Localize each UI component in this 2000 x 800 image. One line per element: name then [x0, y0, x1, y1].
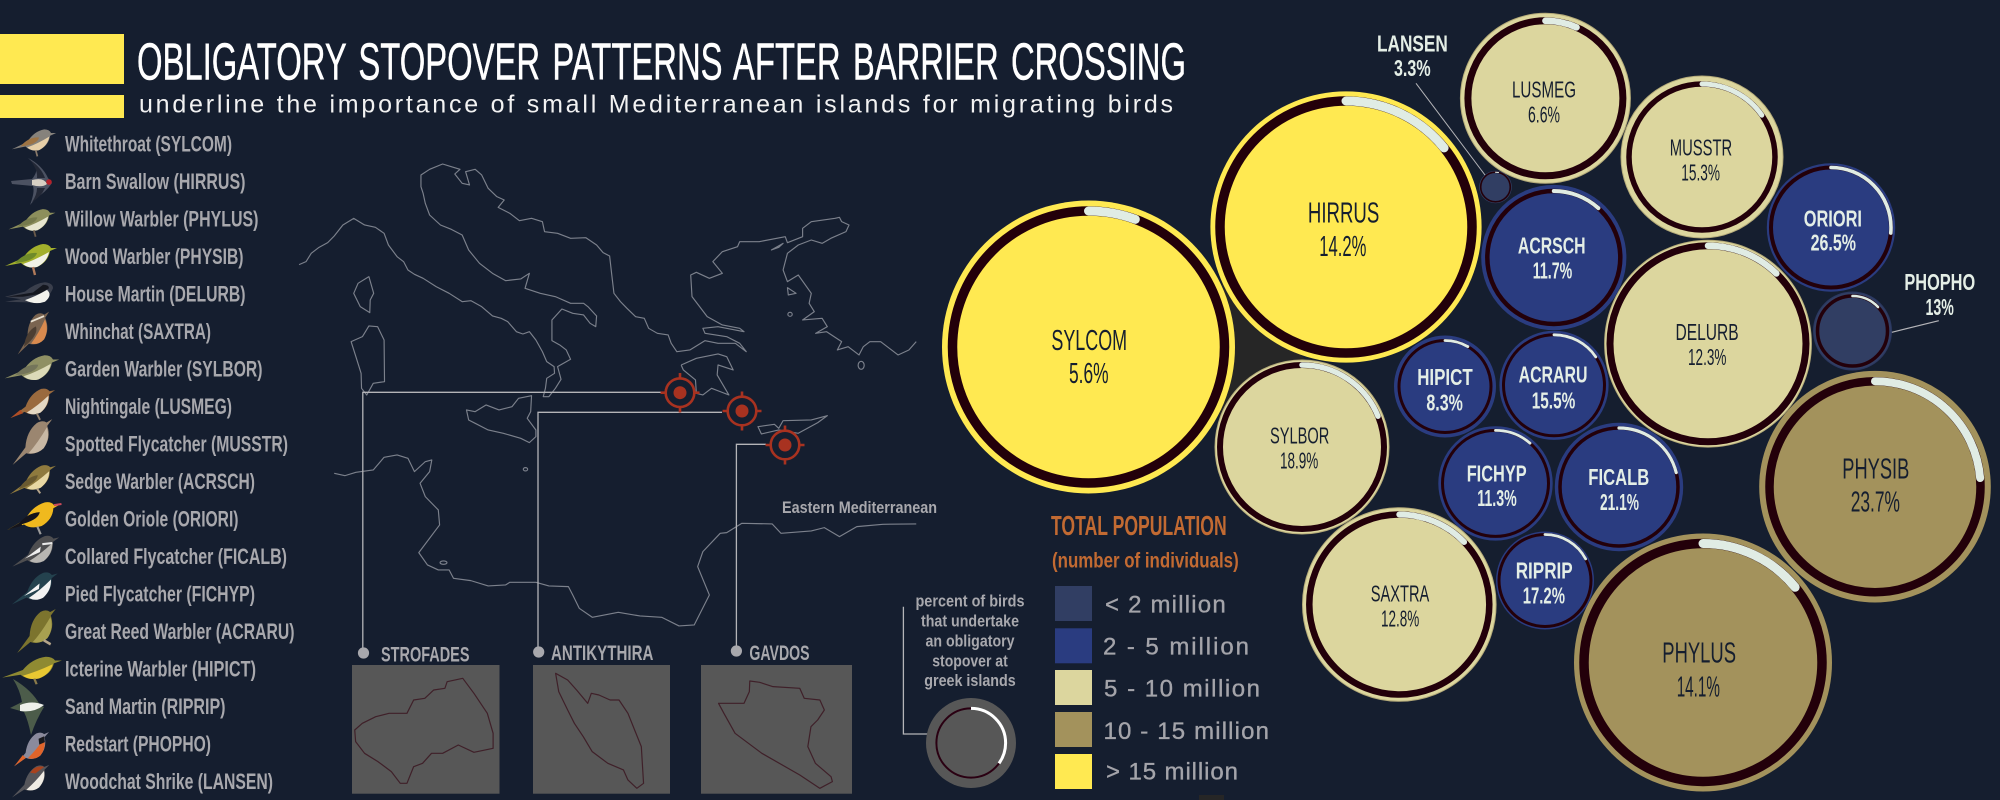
- island box: [701, 665, 852, 794]
- callout: LANSEN: 3.3%: [1394, 55, 1431, 81]
- bubble: ORIORI: 26.5%: [1811, 230, 1856, 256]
- icon: collared flycatcher: [8, 533, 64, 568]
- icon: target Gavdos: [766, 426, 804, 464]
- bubble: PHOPHO: [1814, 292, 1892, 370]
- species names: Collared Flycatcher (FICALB): [65, 544, 287, 569]
- heading: ANTIKYTHIRA: [551, 642, 653, 665]
- icon: target Antikythira: [722, 392, 762, 430]
- icon: redstart: [6, 729, 57, 768]
- legend: total population: [1051, 510, 1269, 789]
- bubble: ACRARU: ACRARU: [1519, 362, 1588, 388]
- bubble: SYLBOR: 18.9%: [1280, 447, 1318, 473]
- icon: nightingale: [6, 386, 60, 426]
- gauge caption: stopover at: [932, 652, 1008, 670]
- bubble: DELURB: DELURB: [1676, 319, 1739, 345]
- bubble: MUSSTR: 15.3%: [1681, 160, 1720, 186]
- bubble: RIPRIP: 17.2%: [1523, 582, 1565, 608]
- gauge disc: [926, 698, 1016, 788]
- bubble: LUSMEG: 6.6%: [1528, 101, 1560, 127]
- icon: woodchat shrike: [5, 762, 56, 799]
- species names: Golden Oriole (ORIORI): [65, 507, 238, 532]
- bubble: PHYLUS: PHYLUS: [1662, 638, 1736, 670]
- swatch: 10 to 15 million: [1055, 712, 1269, 747]
- bubble: SYLBOR: [1215, 360, 1389, 534]
- panel: Gavdos island: [701, 642, 852, 794]
- bubble: SAXTRA: 12.8%: [1381, 606, 1419, 632]
- bubble: HIRRUS: 14.2%: [1319, 231, 1366, 263]
- gauge caption: that undertake: [921, 612, 1019, 630]
- icon: whinchat: [5, 308, 61, 356]
- icon: icterine warbler: [2, 657, 62, 684]
- gauge caption: an obligatory: [926, 632, 1015, 650]
- swatch: 2 to 5 million: 2 - 5 million: [1103, 633, 1249, 660]
- bubble: MUSSTR: MUSSTR: [1670, 135, 1732, 161]
- bubble: SYLBOR: SYLBOR: [1270, 422, 1329, 448]
- island outline: [719, 681, 832, 788]
- bubble: PHYLUS: [1574, 534, 1832, 792]
- heading: STROFADES: [381, 644, 470, 667]
- icon: house martin: [5, 282, 53, 303]
- species names: House Martin (DELURB): [65, 282, 246, 307]
- bubble: SAXTRA: [1302, 508, 1496, 701]
- species names: Whitethroat (SYLCOM): [65, 132, 232, 157]
- gauge legend: [903, 592, 1024, 788]
- bubble: SYLCOM: [942, 200, 1235, 494]
- icon: golden oriole: [4, 500, 65, 539]
- bubble: HIRRUS: HIRRUS: [1308, 198, 1379, 230]
- title accent bar: [0, 34, 124, 84]
- species names: Great Reed Warbler (ACRARU): [65, 619, 294, 644]
- subtitle accent bar: [0, 95, 124, 118]
- bubble: LANSEN: [1479, 171, 1512, 203]
- island outline: [355, 678, 493, 783]
- species names: Icterine Warbler (HIPICT): [65, 657, 256, 682]
- bubble: RIPRIP: [1496, 532, 1594, 630]
- legend heading: TOTAL POPULATION: [1051, 510, 1227, 541]
- species names: Garden Warbler (SYLBOR): [65, 357, 262, 382]
- bubble: HIPICT: HIPICT: [1417, 364, 1473, 390]
- species names: Spotted Flycatcher (MUSSTR): [65, 432, 288, 457]
- species names: Barn Swallow (HIRRUS): [65, 169, 246, 194]
- map label: Eastern Mediterranean: [782, 498, 937, 517]
- bubble: FICALB: [1555, 423, 1683, 551]
- icon: barn swallow: [11, 158, 52, 205]
- swatch: over 15 million: [1055, 754, 1238, 789]
- icon: target Strofades: [660, 373, 700, 412]
- bubble: HIRRUS: [1210, 91, 1482, 363]
- bubble: ACRARU: [1499, 331, 1609, 440]
- species names: Whinchat (SAXTRA): [65, 319, 211, 344]
- map: eastern Mediterranean coastline: [299, 164, 916, 626]
- species names: Pied Flycatcher (FICHYP): [65, 582, 255, 607]
- callout: PHOPHO: 13%: [1926, 294, 1954, 320]
- title: OBLIGATORY STOPOVER PATTERNS AFTER BARRIER CROSSING: [137, 34, 1186, 92]
- bubble: SAXTRA: SAXTRA: [1371, 581, 1430, 607]
- icon: sand martin: [10, 679, 44, 735]
- icon: willow warbler: [9, 209, 55, 237]
- legend subheading: (number of individuals): [1052, 550, 1239, 572]
- bubble: SYLCOM: 5.6%: [1069, 358, 1109, 390]
- species names: Sedge Warbler (ACRSCH): [65, 469, 255, 494]
- bubble: FICALB: FICALB: [1588, 464, 1649, 490]
- bubble: ACRSCH: 11.7%: [1533, 257, 1572, 283]
- bubble: MUSSTR: [1621, 76, 1783, 238]
- panel: Antikythira island: [533, 642, 670, 794]
- bubble: FICALB: 21.1%: [1600, 489, 1639, 515]
- icon: spotted flycatcher: [1, 415, 63, 466]
- bubble: ORIORI: ORIORI: [1804, 206, 1862, 232]
- gauge caption: [916, 592, 1024, 690]
- swatch: under 2 million: [1055, 586, 1226, 621]
- bubble: LUSMEG: [1460, 13, 1630, 183]
- bubble: HIPICT: 8.3%: [1426, 390, 1463, 416]
- bubble: DELURB: 12.3%: [1688, 344, 1726, 370]
- bubble: PHYSIB: PHYSIB: [1842, 453, 1909, 485]
- species names: Wood Warbler (PHYSIB): [65, 244, 244, 269]
- title banner: [0, 34, 1186, 118]
- bubble: ACRSCH: [1481, 185, 1626, 330]
- species names: Nightingale (LUSMEG): [65, 394, 232, 419]
- icon: sedge warbler: [5, 462, 62, 501]
- species names: Woodchat Shrike (LANSEN): [65, 769, 273, 794]
- icon: garden warbler: [5, 355, 59, 380]
- bubble: DELURB: [1605, 240, 1811, 447]
- bubble: SYLCOM: SYLCOM: [1051, 325, 1127, 357]
- island outline: [556, 673, 644, 788]
- species names: Sand Martin (RIPRIP): [65, 694, 226, 719]
- bubble: ACRSCH: ACRSCH: [1518, 232, 1586, 258]
- swatch: 10 to 15 million: 10 - 15 million: [1104, 718, 1269, 745]
- bubble: PHYLUS: 14.1%: [1677, 672, 1720, 704]
- icon: great reed warbler: [5, 605, 69, 660]
- swatch: over 15 million: > 15 million: [1106, 758, 1238, 785]
- bubble: ORIORI: [1767, 163, 1895, 292]
- gauge caption: percent of birds: [916, 592, 1024, 610]
- bubble: ACRARU: 15.5%: [1532, 387, 1575, 413]
- species names: Redstart (PHOPHO): [65, 732, 211, 757]
- bubble: FICHYP: [1438, 426, 1553, 541]
- bubble: PHYSIB: [1759, 371, 1991, 602]
- bubble: RIPRIP: RIPRIP: [1516, 557, 1573, 583]
- island box: [352, 665, 500, 794]
- species names: [65, 132, 294, 794]
- bubble: LUSMEG: LUSMEG: [1512, 76, 1576, 102]
- bubble: FICHYP: FICHYP: [1467, 461, 1527, 487]
- swatch: 5 to 10 million: [1055, 670, 1260, 705]
- callout: PHOPHO: [1892, 269, 1975, 332]
- heading: GAVDOS: [749, 642, 810, 665]
- species names: Willow Warbler (PHYLUS): [65, 207, 258, 232]
- bubble: HIPICT: [1394, 336, 1496, 438]
- swatch: 2 to 5 million: [1055, 628, 1249, 663]
- icon: pied flycatcher: [6, 569, 63, 606]
- island box: [533, 665, 670, 794]
- subtitle: underline the importance of small Mediterranean islands for migrating birds: [139, 90, 1173, 118]
- bubble: PHYSIB: 23.7%: [1851, 487, 1900, 519]
- panel: Strofades island: [352, 644, 500, 794]
- swatch: under 2 million: < 2 million: [1105, 592, 1226, 619]
- callout: LANSEN: [1377, 31, 1485, 175]
- bubble: FICHYP: 11.3%: [1477, 485, 1517, 511]
- icon: whitethroat: [12, 129, 56, 156]
- species list: [1, 129, 294, 799]
- swatch: 5 to 10 million: 5 - 10 million: [1104, 676, 1260, 703]
- leader lines from targets to island panels: [358, 392, 766, 659]
- gauge caption: greek islands: [924, 671, 1016, 690]
- bubble chart: [942, 13, 1991, 792]
- callout: LANSEN: LANSEN: [1377, 31, 1448, 57]
- icon: wood warbler: [5, 244, 57, 275]
